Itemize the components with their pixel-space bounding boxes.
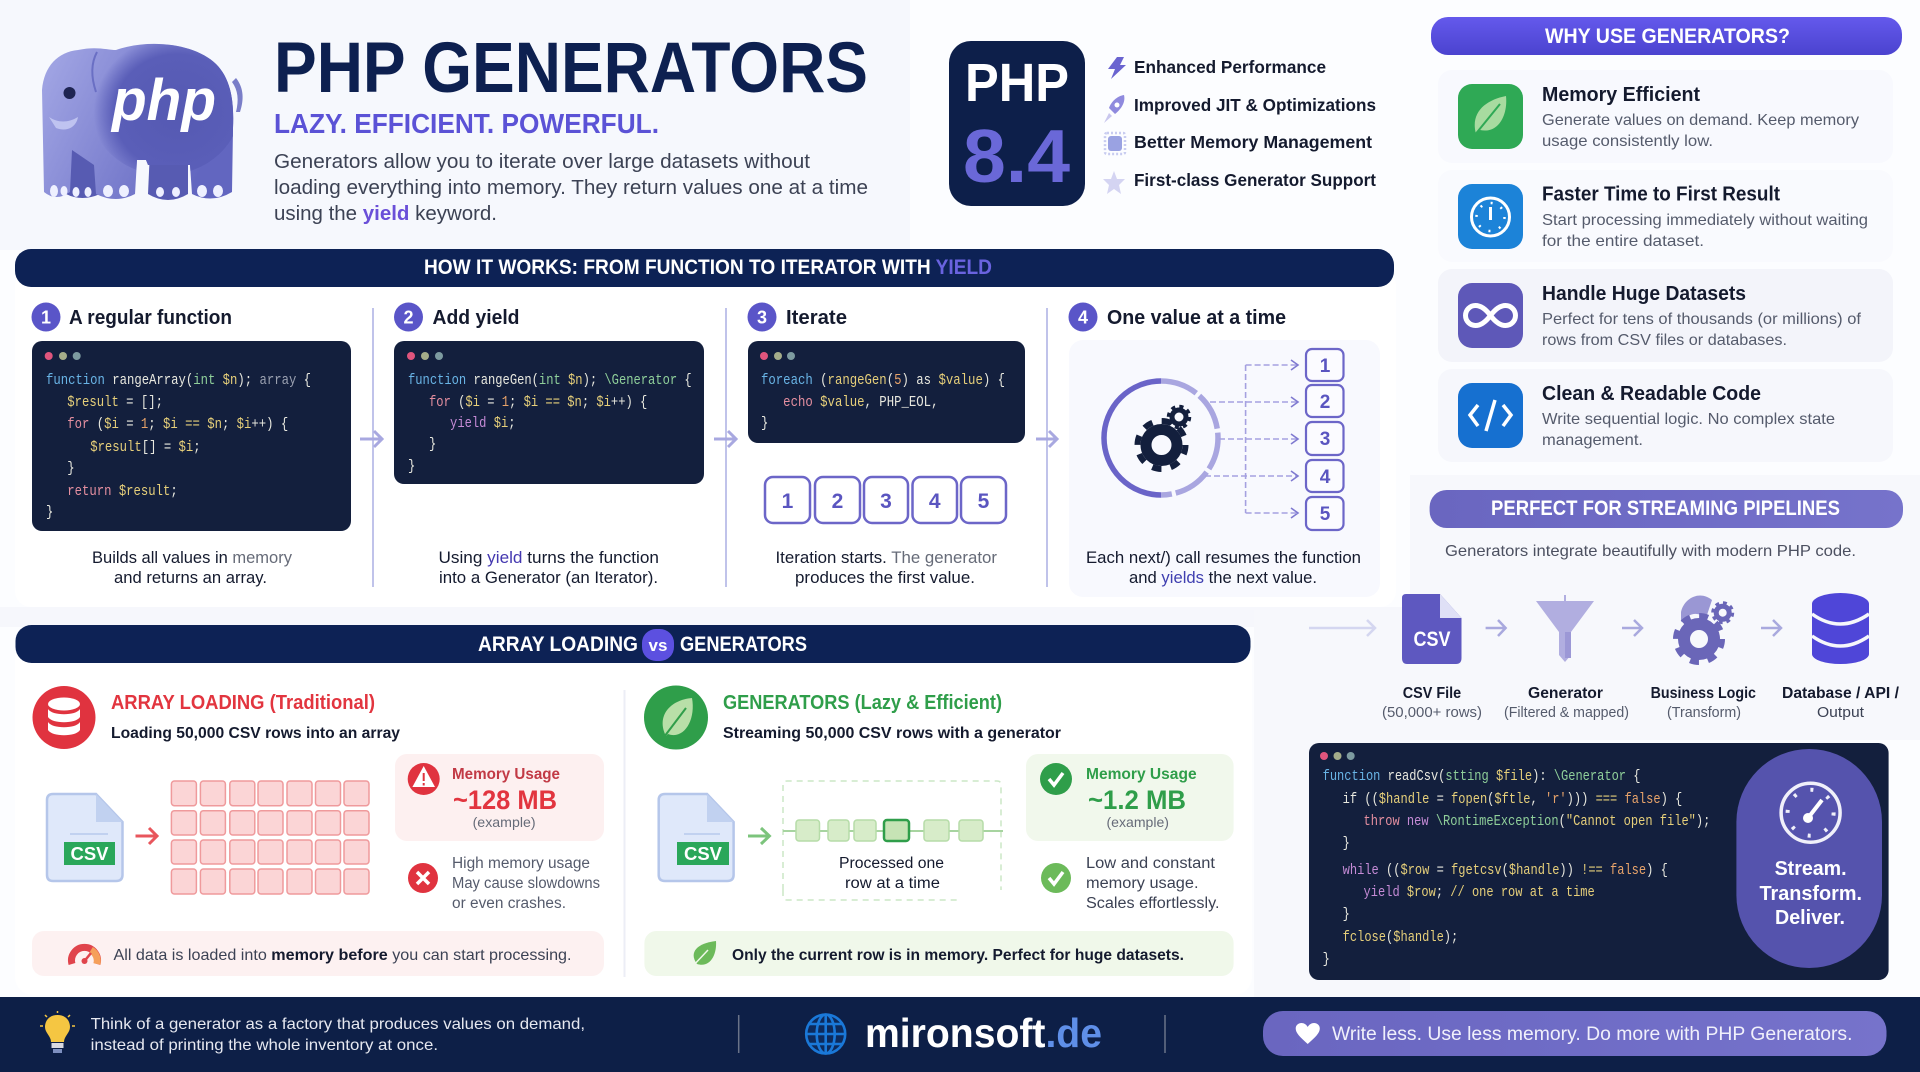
code block: readCsv: } bbox=[1343, 836, 1350, 853]
icon: star bbox=[1103, 171, 1125, 194]
code block: foreach: foreach (rangeGen(5) as $value) { bbox=[761, 372, 1005, 389]
step 2: 2 bbox=[404, 308, 414, 328]
value stack bbox=[1306, 349, 1344, 530]
footer bbox=[0, 997, 1920, 1072]
panel: how it works bbox=[15, 249, 1396, 607]
arrow bbox=[1622, 620, 1642, 636]
value stack: 3 bbox=[1320, 429, 1330, 450]
card: faster time bbox=[1438, 170, 1893, 262]
feature list: First-class Generator Support bbox=[1134, 170, 1376, 190]
step 1 bbox=[32, 302, 351, 587]
pipeline: database bbox=[1782, 593, 1900, 721]
memory stat: Memory Usage bbox=[1086, 766, 1197, 783]
warning list bbox=[408, 855, 600, 912]
heading: array vs generators: ARRAY LOADING bbox=[478, 633, 638, 656]
card: huge datasets: Handle Huge Datasets bbox=[1542, 283, 1746, 305]
feature list: Enhanced Performance bbox=[1134, 57, 1326, 77]
heading: why use generators: WHY USE GENERATORS? bbox=[1545, 25, 1790, 48]
pipeline: business logic gear: Business Logic bbox=[1651, 685, 1756, 702]
card: huge datasets: Perfect for tens of thousands (or millions) of bbox=[1542, 311, 1862, 328]
column: array loading: Loading 50,000 CSV rows into an array bbox=[111, 725, 400, 742]
warning list: or even crashes. bbox=[452, 895, 566, 912]
benefit list: memory usage. bbox=[1086, 875, 1198, 892]
description: and yields the next value. bbox=[1129, 569, 1317, 587]
step 1: 1 bbox=[41, 308, 51, 328]
pipeline: business logic gear: (Transform) bbox=[1667, 705, 1741, 721]
PHP 8.4 badge: PHP bbox=[965, 53, 1069, 113]
feature list: Better Memory Management bbox=[1134, 132, 1372, 152]
card: clean code: Write sequential logic. No complex state bbox=[1542, 411, 1835, 428]
step 4: One value at a time bbox=[1107, 307, 1286, 329]
callout bbox=[32, 931, 604, 976]
step 2: Add yield bbox=[432, 307, 520, 329]
heading: why use generators bbox=[1431, 17, 1902, 55]
code block: rangeGen: } bbox=[408, 459, 415, 475]
code block: rangeArray: return $result; bbox=[67, 484, 178, 500]
step 3: 3 bbox=[757, 308, 767, 328]
pipeline: database: Database / API / bbox=[1782, 685, 1900, 702]
description: into a Generator (an Iterator). bbox=[439, 569, 658, 587]
arrow bbox=[1486, 620, 1506, 636]
gear cycle bbox=[1104, 381, 1218, 495]
code block: rangeArray: function rangeArray(int $n); array { bbox=[46, 373, 311, 389]
heading: how it works bbox=[15, 249, 1394, 287]
code block: foreach: echo $value, PHP_EOL, bbox=[783, 394, 938, 411]
memory stat bbox=[395, 754, 604, 841]
values 1 to 5: 1 bbox=[782, 490, 794, 513]
description bbox=[92, 549, 293, 587]
heading: streaming pipelines: PERFECT FOR STREAMING PIPELINES bbox=[1491, 497, 1840, 520]
code block: rangeGen: for ($i = 1; $i == $n; $i++) { bbox=[429, 395, 647, 411]
code block: rangeGen: function rangeGen(int $n); \Generator { bbox=[408, 373, 692, 389]
memory stat bbox=[1026, 754, 1234, 841]
description: Using yield turns the function bbox=[438, 549, 659, 567]
arrow bbox=[714, 431, 736, 447]
code block: foreach: } bbox=[761, 415, 768, 432]
icon: csv file bbox=[659, 794, 734, 881]
memory stat: Memory Usage bbox=[452, 766, 560, 783]
code block: foreach bbox=[748, 341, 1025, 443]
pipeline: csv file: (50,000+ rows) bbox=[1382, 705, 1482, 721]
column: generators: GENERATORS (Lazy & Efficient) bbox=[723, 692, 1002, 714]
value stack: 1 bbox=[1320, 356, 1331, 377]
column: generators bbox=[644, 686, 1234, 976]
code block: rangeArray: $result = []; bbox=[67, 395, 163, 411]
card: faster time: Faster Time to First Result bbox=[1542, 184, 1780, 206]
benefit list: Low and constant bbox=[1086, 855, 1216, 872]
card: huge datasets bbox=[1438, 269, 1893, 362]
panel: streaming pipelines: Generators integrate beautifully with modern PHP code. bbox=[1445, 543, 1856, 560]
values 1 to 5: 4 bbox=[929, 490, 941, 513]
step 3 bbox=[748, 302, 1025, 587]
memory stat: (example) bbox=[1106, 814, 1169, 830]
description bbox=[438, 549, 659, 587]
code block: rangeArray: } bbox=[67, 461, 75, 477]
heading: array vs generators: vs bbox=[649, 636, 667, 655]
heading: how it works: HOW IT WORKS: FROM FUNCTION TO ITERATOR WITH YIELD bbox=[424, 256, 992, 279]
PHP 8.4 badge bbox=[949, 41, 1085, 206]
arrow bbox=[136, 828, 157, 844]
description: Each next/) call resumes the function bbox=[1086, 549, 1361, 567]
pipeline: database: Output bbox=[1817, 705, 1864, 721]
values 1 to 5: 2 bbox=[832, 490, 843, 513]
memory stat: ~1.2 MB bbox=[1088, 785, 1186, 815]
elephant logo: php bbox=[110, 68, 216, 133]
pipeline: generator funnel: (Filtered & mapped) bbox=[1504, 705, 1629, 721]
heading: array vs generators: GENERATORS bbox=[680, 633, 807, 656]
code block: readCsv: while (($row = fgetcsv($handle)) !== false) { bbox=[1343, 863, 1668, 880]
slogan pill: Write less. Use less memory. Do more with PHP Generators. bbox=[1332, 1024, 1852, 1045]
pipeline: generator funnel bbox=[1504, 595, 1629, 721]
benefit list: Scales effortlessly. bbox=[1086, 895, 1220, 912]
warning list: May cause slowdowns bbox=[452, 875, 600, 892]
card: clean code: Clean & Readable Code bbox=[1542, 383, 1761, 405]
icon: csv file: CSV bbox=[70, 844, 108, 864]
column: array loading bbox=[32, 686, 604, 976]
icon: chip bbox=[1105, 133, 1125, 154]
dashed arrows bbox=[1205, 360, 1298, 518]
tip text: instead of printing the whole inventory at once. bbox=[91, 1037, 438, 1054]
code block: rangeArray: } bbox=[46, 505, 53, 521]
row stream: Processed one bbox=[839, 855, 944, 872]
card: memory efficient: Memory Efficient bbox=[1542, 84, 1700, 106]
arrow bbox=[1309, 620, 1375, 636]
description: and returns an array. bbox=[114, 569, 267, 587]
arrow bbox=[1761, 620, 1781, 636]
step 4: 4 bbox=[1078, 308, 1088, 328]
icon: database bbox=[32, 686, 96, 749]
column: array loading: ARRAY LOADING (Traditional) bbox=[111, 692, 375, 714]
code block: rangeGen: yield $i; bbox=[450, 416, 516, 432]
icon: light bulb bbox=[40, 1011, 75, 1053]
intro text: Generators allow you to iterate over large datasets without bbox=[274, 150, 810, 173]
step 2 bbox=[394, 302, 704, 587]
description: Iteration starts. The generator bbox=[776, 549, 998, 567]
code block: readCsv: throw new \RontimeException("Cannot open file"); bbox=[1364, 814, 1710, 831]
brand: mironsoft.de: mironsoft.de bbox=[865, 1010, 1102, 1056]
description: Builds all values in memory bbox=[92, 549, 293, 567]
code block: rangeGen bbox=[394, 341, 704, 484]
card: memory efficient: Generate values on demand. Keep memory bbox=[1542, 112, 1859, 129]
arrow bbox=[1036, 431, 1057, 447]
panel: streaming pipelines bbox=[1309, 490, 1903, 980]
tip text bbox=[91, 1016, 585, 1054]
icon: csv file: CSV bbox=[684, 844, 722, 864]
feature list: Improved JIT & Optimizations bbox=[1134, 95, 1376, 115]
card: clean code bbox=[1438, 369, 1893, 462]
pipeline: csv file: CSV bbox=[1414, 628, 1450, 651]
code block: readCsv: function readCsv(stting $file): \Generator { bbox=[1323, 769, 1640, 786]
card: faster time: Start processing immediately without waiting bbox=[1542, 212, 1868, 229]
code block: rangeArray bbox=[32, 341, 351, 531]
card: clean code: management. bbox=[1542, 432, 1643, 449]
values 1 to 5: 5 bbox=[978, 490, 990, 513]
card: huge datasets: rows from CSV files or databases. bbox=[1542, 332, 1787, 349]
heading: array vs generators bbox=[16, 625, 1250, 663]
callout: stream transform deliver bbox=[1736, 749, 1882, 968]
value stack: 2 bbox=[1320, 392, 1330, 413]
values 1 to 5: 3 bbox=[880, 490, 892, 513]
pipeline: business logic gear bbox=[1651, 596, 1756, 721]
PHP 8.4 badge: 8.4 bbox=[963, 114, 1070, 198]
memory grid bbox=[171, 781, 369, 894]
benefit list bbox=[1041, 855, 1220, 912]
card: faster time: for the entire dataset. bbox=[1542, 233, 1704, 250]
intro text: loading everything into memory. They return values one at a time bbox=[274, 176, 868, 199]
values 1 to 5 bbox=[765, 477, 1006, 523]
code block: readCsv: if (($handle = fopen($ftle, 'r'))) === false) { bbox=[1343, 792, 1682, 809]
code block: rangeGen: } bbox=[429, 437, 436, 453]
code block: readCsv: yield $row; // one row at a time bbox=[1364, 885, 1595, 902]
code block: rangeArray: $result[] = $i; bbox=[90, 440, 201, 456]
memory stat: ~128 MB bbox=[453, 785, 557, 815]
memory stat: (example) bbox=[473, 814, 536, 830]
intro text bbox=[274, 150, 868, 225]
callout: All data is loaded into memory before you can start processing. bbox=[114, 947, 572, 964]
description: produces the first value. bbox=[795, 569, 975, 587]
code block: readCsv: fclose($handle); bbox=[1343, 930, 1458, 947]
code block: readCsv: } bbox=[1343, 907, 1350, 924]
heading: streaming pipelines bbox=[1430, 490, 1903, 528]
callout: Only the current row is in memory. Perfect for huge datasets. bbox=[732, 947, 1184, 964]
row stream bbox=[783, 781, 1003, 900]
slogan pill bbox=[1263, 1011, 1886, 1056]
description bbox=[1086, 549, 1361, 587]
card: memory efficient bbox=[1438, 70, 1893, 163]
pipeline: generator funnel: Generator bbox=[1528, 685, 1603, 702]
value stack: 5 bbox=[1320, 504, 1331, 525]
callout: stream transform deliver: Deliver. bbox=[1775, 907, 1845, 929]
callout: stream transform deliver: Transform. bbox=[1760, 883, 1862, 905]
row stream: row at a time bbox=[845, 875, 940, 892]
subtitle: LAZY. EFFICIENT. POWERFUL. bbox=[274, 108, 659, 139]
value stack: 4 bbox=[1320, 467, 1331, 488]
callout bbox=[644, 931, 1234, 976]
step 4 bbox=[1068, 302, 1380, 597]
arrow bbox=[360, 431, 382, 447]
code block: readCsv: } bbox=[1323, 952, 1330, 969]
arrow bbox=[748, 828, 769, 844]
description bbox=[776, 549, 998, 587]
warning list: High memory usage bbox=[452, 855, 590, 872]
title: PHP GENERATORS bbox=[274, 29, 868, 108]
elephant logo bbox=[42, 35, 243, 200]
step 3: Iterate bbox=[786, 307, 847, 329]
tip text: Think of a generator as a factory that produces values on demand, bbox=[91, 1016, 585, 1033]
icon: csv file bbox=[47, 794, 122, 881]
pipeline: csv file: CSV File bbox=[1403, 685, 1462, 702]
feature list bbox=[1103, 57, 1376, 194]
callout: stream transform deliver: Stream. bbox=[1775, 858, 1847, 880]
step 1: A regular function bbox=[69, 307, 232, 329]
code block: rangeArray: for ($i = 1; $i == $n; $i++) { bbox=[67, 417, 288, 433]
pipeline: csv file bbox=[1382, 594, 1482, 721]
icon: bolt bbox=[1108, 57, 1126, 79]
panel: why use generators bbox=[1431, 17, 1902, 462]
column: generators: Streaming 50,000 CSV rows with a generator bbox=[723, 725, 1061, 742]
intro text: using the yield keyword. bbox=[274, 202, 497, 225]
code block: readCsv bbox=[1309, 743, 1889, 980]
panel: array vs generators bbox=[15, 625, 1252, 995]
icon: leaf bbox=[644, 686, 708, 750]
card: memory efficient: usage consistently low. bbox=[1542, 133, 1713, 150]
icon: rocket bbox=[1104, 95, 1124, 123]
